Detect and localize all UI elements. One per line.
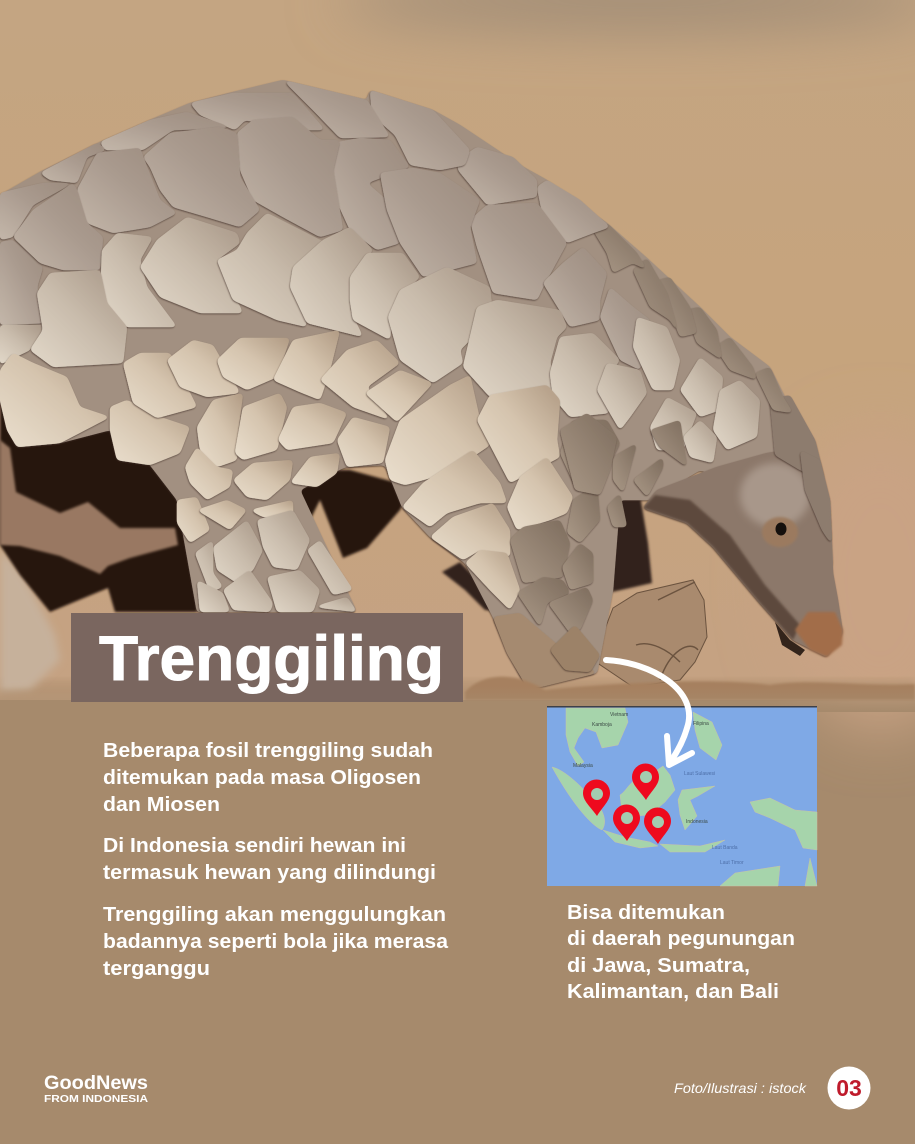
neck shading [643,495,800,640]
fact: fossil: dan Miosen [103,794,220,816]
map caption: Kalimantan, dan Bali [567,981,779,1003]
fact: fossil: ditemukan pada masa Oligosen [103,767,421,789]
front foot [593,580,707,687]
fact: rolling: badannya seperti bola jika merasa [103,931,449,953]
fact: rolling: terganggu [103,958,210,980]
map labels: Laut Banda [712,845,738,851]
fact: protected [103,835,436,884]
title banner: Trenggiling [99,624,444,694]
head and snout [643,450,843,657]
map pin: Kalimantan [632,764,659,800]
map labels [573,712,744,866]
map pin: Bali [644,808,671,844]
front leg scales [510,413,687,633]
fact: fossil: Beberapa fosil trenggiling sudah [103,740,433,762]
eye ring [762,517,798,547]
map land [552,708,817,886]
fact: rolling: Trenggiling akan menggulungkan [103,904,446,926]
map of Indonesia [547,706,817,886]
map labels: Filipina [693,721,709,727]
fact: protected: Di Indonesia sendiri hewan ini [103,835,406,857]
body silhouette [0,80,833,687]
map caption: di daerah pegunungan [567,928,795,950]
page number: 03 [836,1075,862,1101]
map labels: Vietnam [610,712,628,718]
title banner [71,613,463,702]
map labels: Indonesia [686,819,708,825]
upper rear scales [0,80,650,370]
head highlight [740,463,810,527]
logo: GoodNews from Indonesia: GoodNews [44,1073,148,1094]
map caption: di Jawa, Sumatra, [567,955,750,977]
photo credit: Foto/Ilustrasi : istock [674,1080,807,1096]
text block: facts [103,740,449,980]
snout dirt [775,622,805,656]
fact: fossil [103,740,433,816]
arrow to map [606,660,692,765]
page number [828,1066,870,1110]
map labels: Laut Timor [720,860,744,866]
fact: protected: termasuk hewan yang dilindungi [103,862,436,884]
map labels: Kamboja [592,722,612,728]
snout tip [795,612,843,657]
scales [0,80,793,687]
map pin: Sumatra [583,780,610,816]
head scales [770,395,832,545]
front flank scales [0,330,573,610]
pangolin dark underside [0,400,412,612]
shadow on the ground [442,562,506,612]
map pin: Jawa [613,804,640,841]
photo: pangolin [0,80,915,712]
logo: GoodNews from Indonesia [44,1073,148,1105]
leg scales [195,510,357,612]
eye [776,522,786,536]
foot scale [550,625,600,672]
neck shadow [612,495,652,592]
map caption [567,902,795,1003]
ground debris [465,677,915,700]
pangolin belly [0,440,178,574]
logo: GoodNews from Indonesia: FROM INDONESIA [44,1094,148,1105]
mid flank scales [0,213,760,463]
map caption: Bisa ditemukan [567,902,725,924]
neck ridge scales [593,223,793,527]
fact: rolling [103,904,449,980]
map labels: Malaysia [573,763,593,769]
map labels: Laut Sulawesi [684,771,715,777]
left blurred scale [0,548,60,692]
foot toe lines [636,582,698,680]
lower front leg [493,613,597,687]
fade into panel [0,686,915,712]
